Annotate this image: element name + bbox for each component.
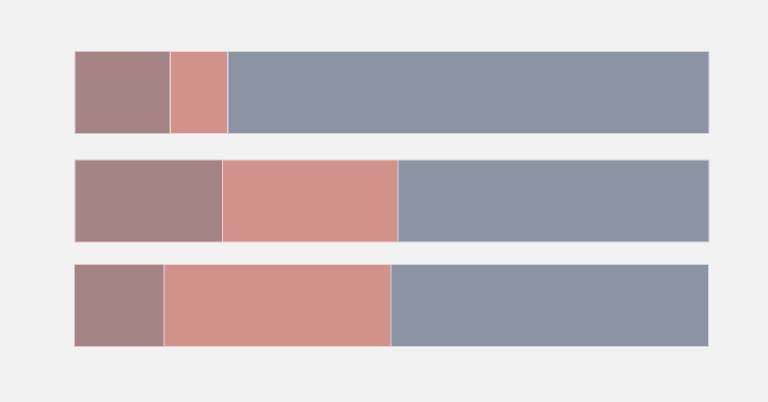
bar 1 (75, 52, 709, 134)
bar 3 (74, 264, 708, 346)
bar 2 (75, 160, 709, 242)
